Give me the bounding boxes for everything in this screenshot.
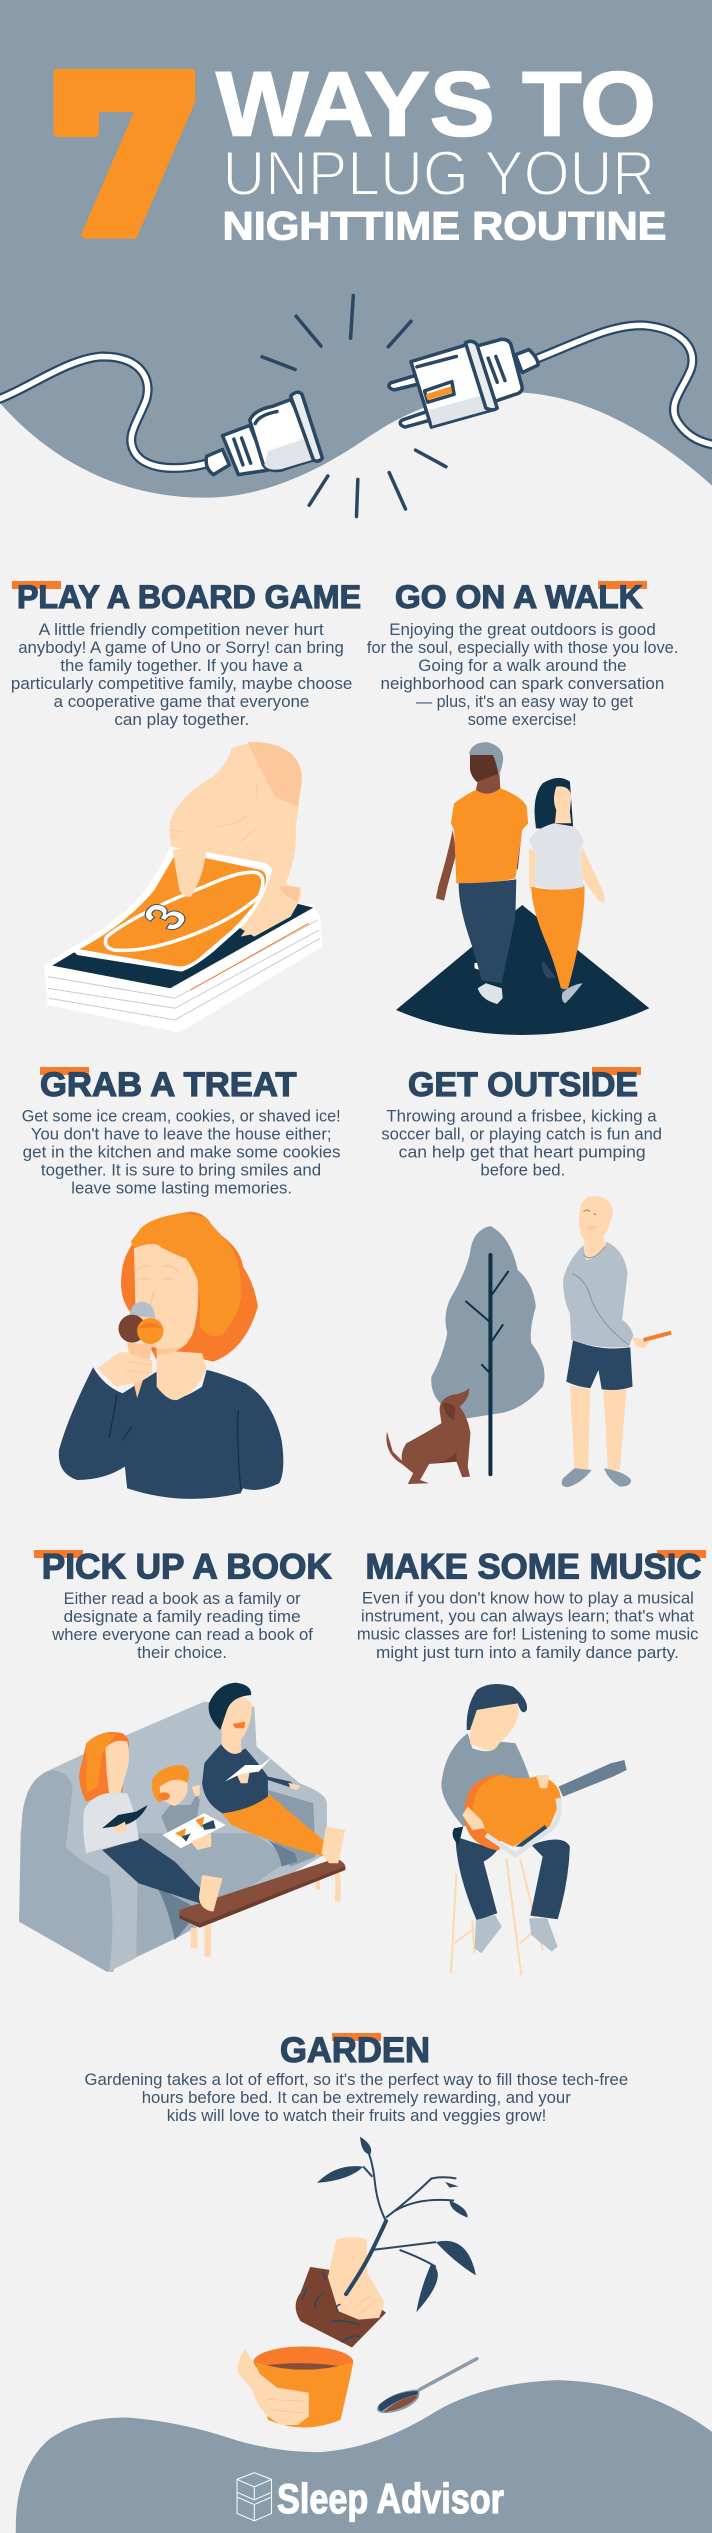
panel: grab a treat <box>22 1066 341 1499</box>
panel: garden <box>84 2031 628 2428</box>
sofa <box>19 1702 327 1972</box>
illustration: couple walking <box>396 742 649 1035</box>
footer wave <box>16 2380 712 2533</box>
heading accent bar <box>598 581 647 589</box>
panel: make some music <box>357 1548 706 1975</box>
torso <box>441 1733 531 1827</box>
body text: music classes are for! Listening to some music <box>357 1624 699 1643</box>
roots <box>302 2274 360 2342</box>
body text <box>357 1588 699 1662</box>
man <box>562 1196 671 1487</box>
spoon <box>377 2359 477 2413</box>
title number 7 <box>54 69 195 239</box>
body text: anybody! A game of Uno or Sorry! can bring <box>18 638 344 657</box>
body text: Enjoying the great outdoors is good <box>389 620 656 639</box>
body text <box>367 620 678 729</box>
right plug <box>389 339 538 427</box>
illustration: hand and cards <box>44 742 322 1033</box>
body text: might just turn into a family dance party. <box>376 1643 679 1662</box>
header: wave background and title <box>0 0 712 498</box>
heading accent bar <box>592 1067 641 1075</box>
body text: particularly competitive family, maybe choose <box>11 674 352 693</box>
body text: Gardening takes a lot of effort, so it's the perfect way to fill those tech-free <box>84 2070 628 2089</box>
tree <box>431 1226 545 1474</box>
body text: a cooperative game that everyone <box>54 692 309 711</box>
heading: GRAB A TREAT <box>40 1066 297 1104</box>
head and hair <box>470 1703 518 1751</box>
man with book <box>202 1683 345 1863</box>
title text: WAYS TO <box>216 54 656 156</box>
body text <box>381 1107 662 1180</box>
right cable <box>538 325 712 445</box>
panel: get outside <box>381 1066 671 1487</box>
body text: hours before bed. It can be extremely rewarding, and your <box>142 2088 571 2107</box>
body text: designate a family reading time <box>64 1607 301 1626</box>
card number: 3 <box>131 896 201 938</box>
illustration: repotting a plant <box>238 2137 477 2428</box>
body text: Throwing around a frisbee, kicking a <box>386 1107 657 1126</box>
body text: get in the kitchen and make some cookies <box>23 1143 341 1162</box>
body text: Even if you don't know how to play a musical <box>362 1588 694 1607</box>
body text: before bed. <box>480 1161 565 1180</box>
body text: their choice. <box>137 1643 227 1662</box>
panel: play a board game <box>11 579 361 1033</box>
panel: pick up a book <box>19 1548 345 1972</box>
illustration: man, dog and tree <box>386 1196 671 1487</box>
body text: for the soul, especially with those you love. <box>367 638 678 657</box>
body text: instrument, you can always learn; that's what <box>361 1606 694 1625</box>
heading accent bar <box>34 1550 83 1558</box>
heading: PLAY A BOARD GAME <box>17 579 361 615</box>
body text: You don't have to leave the house either; <box>31 1125 332 1144</box>
body text: where everyone can read a book of <box>51 1625 313 1644</box>
logo text: Sleep Advisor <box>277 2475 504 2522</box>
legs <box>455 1837 570 1921</box>
body text: kids will love to watch their fruits and veggies grow! <box>167 2106 546 2125</box>
body text: some exercise! <box>468 710 577 729</box>
flower pot <box>238 2346 353 2428</box>
logo icon <box>237 2473 272 2521</box>
heading: PICK UP A BOOK <box>42 1548 332 1587</box>
body text: Going for a walk around the <box>418 656 627 675</box>
guitar <box>464 1760 627 1855</box>
body text: Get some ice cream, cookies, or shaved ice! <box>22 1107 341 1126</box>
illustration: unplugged cable <box>0 295 712 517</box>
woman with book <box>79 1732 223 1912</box>
heading accent bar <box>40 1067 89 1075</box>
body text: leave some lasting memories. <box>71 1179 292 1198</box>
body text: soccer ball, or playing catch is fun and <box>381 1125 662 1144</box>
body text: A little friendly competition never hurt <box>39 620 324 639</box>
stool <box>451 1858 543 1975</box>
header wave <box>0 0 712 498</box>
body text <box>84 2070 628 2125</box>
heading: GET OUTSIDE <box>408 1066 638 1104</box>
body text <box>51 1589 313 1662</box>
heading: GO ON A WALK <box>395 579 642 615</box>
left plug <box>206 392 322 475</box>
illustration: man playing guitar <box>441 1684 627 1975</box>
soil block <box>296 2267 386 2347</box>
plant stem and leaves <box>317 2137 476 2312</box>
body text: can help get that heart pumping <box>399 1143 646 1162</box>
heading accent bar <box>332 2033 381 2041</box>
body text: the family together. If you have a <box>60 656 303 675</box>
panel: go on a walk <box>367 579 678 1035</box>
child with picture book <box>152 1765 226 1850</box>
heading accent bar <box>657 1550 706 1558</box>
illustration: woman eating ice cream <box>59 1212 283 1499</box>
body text: Either read a book as a family or <box>64 1589 301 1608</box>
heading: MAKE SOME MUSIC <box>366 1548 702 1587</box>
title text: UNPLUG YOUR <box>222 139 655 209</box>
body text <box>11 620 352 729</box>
body text: neighborhood can spark conversation <box>380 674 664 693</box>
hands <box>462 1775 549 1830</box>
dog <box>386 1388 470 1484</box>
logo: Sleep Advisor <box>237 2473 504 2522</box>
title text <box>216 54 666 248</box>
illustration: family reading on sofa <box>19 1683 345 1972</box>
heading accent bar <box>12 581 61 589</box>
spark lines <box>262 295 446 517</box>
body text <box>22 1107 341 1198</box>
body text: — plus, it's an easy way to get <box>416 692 633 711</box>
left cable <box>0 356 213 468</box>
hand holding plant <box>328 2237 385 2320</box>
body text: can play together. <box>114 710 249 729</box>
title text: NIGHTTIME ROUTINE <box>222 204 666 248</box>
heading: GARDEN <box>280 2031 430 2070</box>
bench <box>179 1858 345 1957</box>
body text: together. It is sure to bring smiles and <box>41 1161 321 1180</box>
